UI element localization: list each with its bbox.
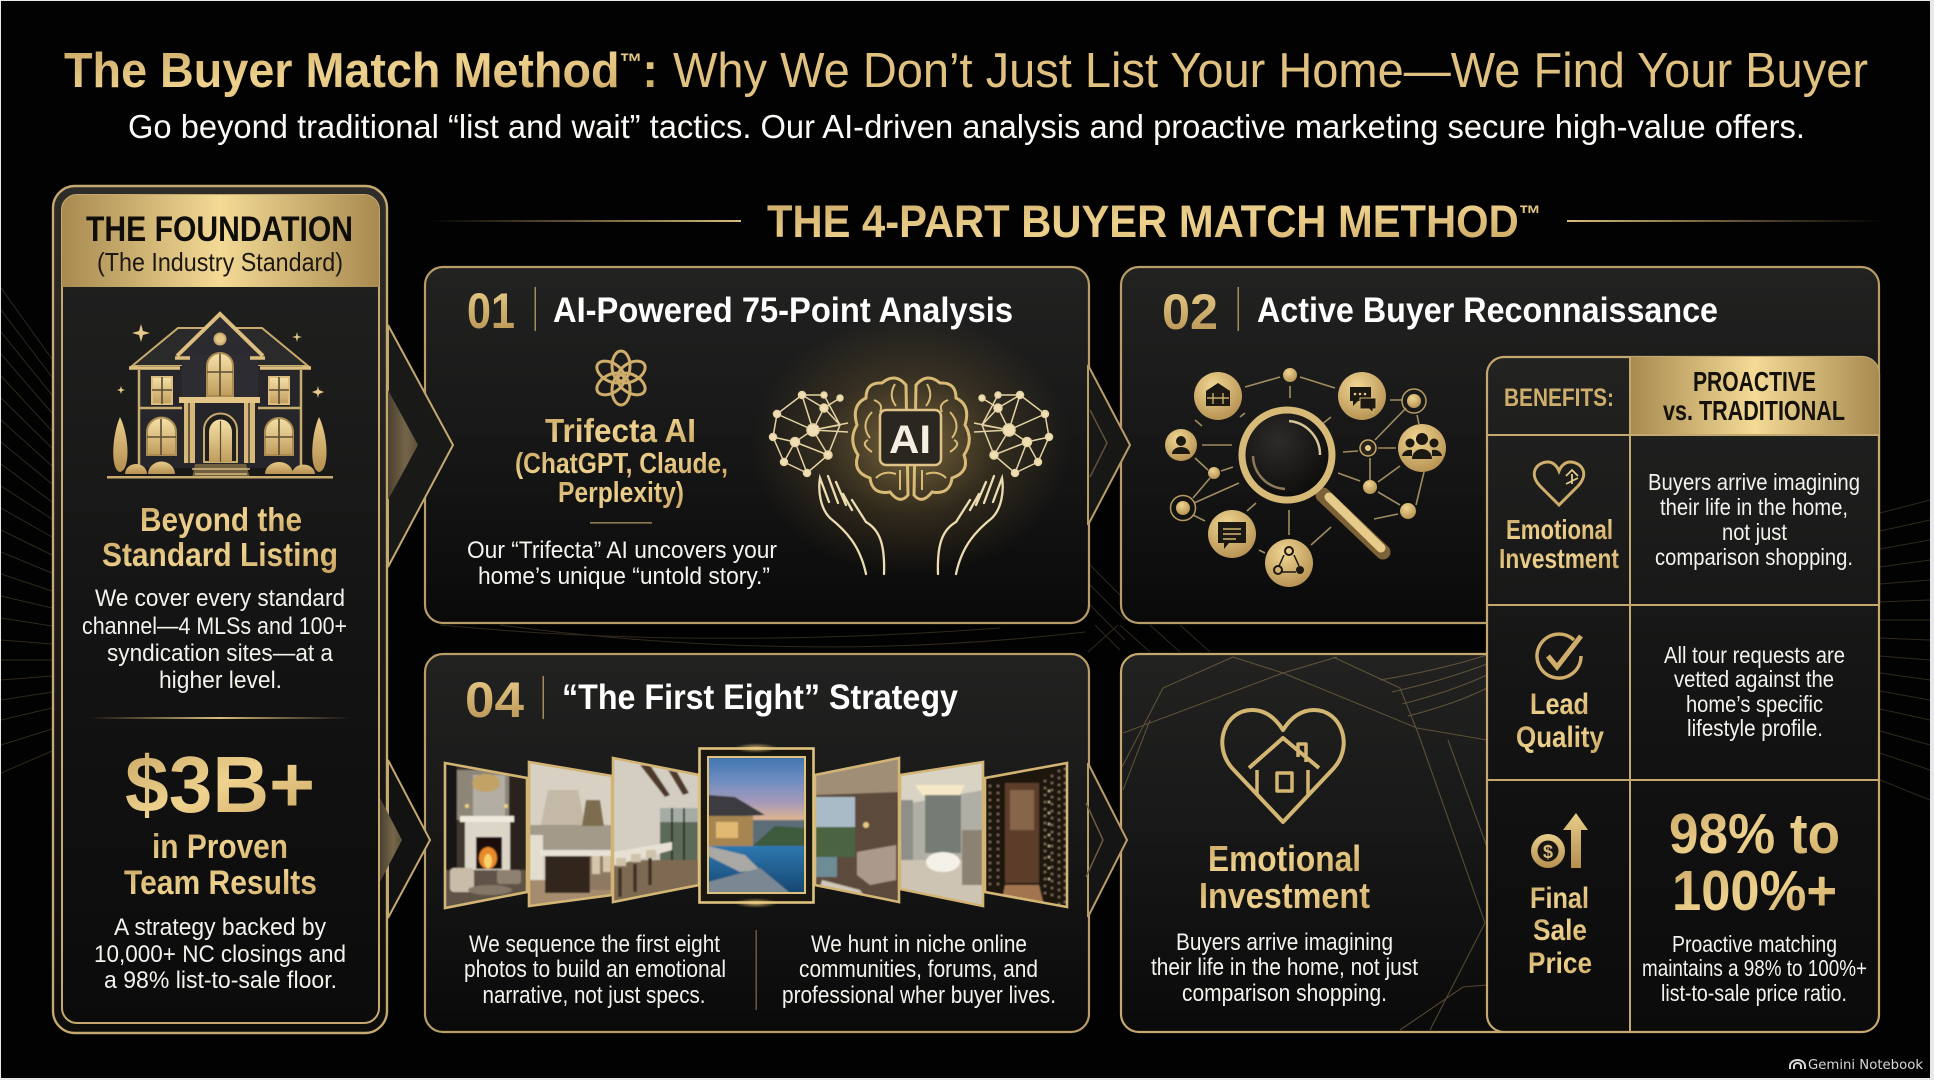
row: emotional investment: not just <box>1722 519 1787 545</box>
arrow: 04 to emotional investment <box>1086 763 1127 917</box>
arrow: foundation to 04 <box>380 760 430 918</box>
table header: BENEFITS: <box>1504 384 1614 412</box>
row: final sale price: Sale <box>1533 914 1587 947</box>
foundation header: THE FOUNDATION <box>86 210 353 249</box>
text: trifecta description <box>467 537 777 590</box>
heading: beyond the standard listing: Standard Listing <box>102 536 338 573</box>
panel: 04 background <box>425 654 1089 1032</box>
row: emotional investment <box>1499 462 1860 574</box>
panel 01 heading: 01 <box>467 283 515 339</box>
row: lead quality: home’s specific <box>1686 691 1823 717</box>
heading: emotional investment: Emotional <box>1208 838 1361 879</box>
text: trifecta AI: (ChatGPT, Claude, <box>515 448 728 480</box>
title: The Buyer Match Method <box>64 44 647 98</box>
panel: 02 background <box>1121 267 1879 623</box>
photo: living room <box>444 762 528 910</box>
text: first eight description: narrative, not just specs. <box>482 982 706 1009</box>
photo: bathroom <box>900 760 984 908</box>
row: lead quality: lifestyle profile. <box>1687 715 1823 741</box>
text: niche communities description: We hunt in niche online <box>811 931 1027 958</box>
icon: trifecta knot <box>593 351 649 405</box>
photo strip <box>440 743 1072 913</box>
table header <box>1504 357 1879 435</box>
text: first eight description <box>464 931 726 1009</box>
text: trifecta AI: Perplexity) <box>558 477 684 509</box>
panel 01 heading: AI-Powered 75-Point Analysis <box>553 291 1013 330</box>
text: foundation proof: A strategy backed by <box>114 914 327 941</box>
text: emotional investment description: their life in the home, not just <box>1151 954 1418 981</box>
text: niche communities description <box>782 931 1056 1009</box>
row: emotional investment: their life in the home, <box>1660 494 1848 520</box>
panel 02 heading <box>1162 284 1718 340</box>
section heading: ™ <box>1519 201 1541 228</box>
icon: coin and up arrow: $ <box>1543 842 1553 862</box>
photo: wine cellar <box>984 762 1068 908</box>
photo: great room <box>612 756 698 904</box>
row: final sale price: Proactive matching <box>1672 931 1837 957</box>
panel 04 heading <box>465 672 958 728</box>
icon: AI brain with hands and networks <box>751 315 1071 575</box>
row: lead quality: Lead <box>1530 688 1589 721</box>
text: emotional investment description: comparison shopping. <box>1182 980 1387 1007</box>
heading: beyond the standard listing: Beyond the <box>140 501 302 538</box>
icon: heart with pin <box>1534 462 1584 505</box>
text: foundation description: higher level. <box>159 667 282 694</box>
text: trifecta description: home’s unique “untold story.” <box>478 563 770 590</box>
text: foundation description: We cover every standard <box>95 585 345 612</box>
text: foundation description: channel—4 MLSs and 100+ <box>82 613 347 640</box>
text: emotional investment description <box>1151 929 1418 1007</box>
text: niche communities description: professional wher buyer lives. <box>782 982 1056 1009</box>
text: trifecta description: Our “Trifecta” AI uncovers your <box>467 537 777 564</box>
title: : <box>642 44 658 98</box>
title: ™ <box>620 49 642 76</box>
stat: 98% to 100%+ <box>1669 802 1840 923</box>
row: final sale price <box>1528 802 1867 1006</box>
text: foundation proof: 10,000+ NC closings and <box>94 941 346 968</box>
icon: gold house <box>107 314 333 478</box>
panel: emotional investment background <box>1121 654 1521 1032</box>
heading: emotional investment <box>1199 838 1370 916</box>
subtitle: Go beyond traditional “list and wait” tactics. Our AI-driven analysis and proactive marketing secure high-value offers. <box>128 108 1805 145</box>
text: foundation proof <box>94 914 346 994</box>
row: emotional investment: Investment <box>1499 543 1619 574</box>
section heading: THE 4-PART BUYER MATCH METHOD <box>767 196 1578 247</box>
icon: AI brain with hands and networks: AI <box>889 418 931 462</box>
panel: 01 background <box>425 267 1089 623</box>
stat: 98% to 100%+: 98% to <box>1669 802 1840 866</box>
row: lead quality <box>1516 634 1845 754</box>
row: lead quality: Quality <box>1516 721 1604 754</box>
photo: hero infinity pool <box>700 743 814 908</box>
table header: PROACTIVE <box>1693 366 1816 397</box>
text: emotional investment description: Buyers arrive imagining <box>1176 929 1393 956</box>
row: emotional investment: comparison shopping. <box>1655 544 1853 570</box>
icon: coin and up arrow <box>1531 813 1588 868</box>
icon: check circle <box>1537 634 1581 678</box>
panel: benefits table <box>1487 357 1879 1032</box>
foundation header: (The Industry Standard) <box>97 247 343 277</box>
panel 02 heading: Active Buyer Reconnaissance <box>1257 291 1718 330</box>
text: foundation description <box>82 585 347 694</box>
icon: heart with house <box>1222 710 1344 822</box>
text: first eight description: We sequence the first eight <box>469 931 720 958</box>
row: emotional investment: Buyers arrive imagining <box>1648 469 1860 495</box>
section heading <box>426 196 1885 247</box>
arrow: foundation to 01 <box>388 325 453 567</box>
watermark: Gemini Notebook: Gemini Notebook <box>1808 1057 1923 1073</box>
row: lead quality: All tour requests are <box>1664 642 1845 668</box>
table header: vs. TRADITIONAL <box>1663 395 1845 426</box>
photo: bedroom <box>814 756 900 904</box>
panel: foundation <box>53 186 387 1033</box>
row: final sale price: list-to-sale price ratio. <box>1661 980 1847 1006</box>
stat: $3B+ in proven team results: Team Results <box>124 864 317 902</box>
stat: $3B+ in proven team results <box>124 740 317 902</box>
title <box>64 44 1868 98</box>
stat: $3B+ in proven team results: in Proven <box>152 828 288 866</box>
icon: magnifier and buyer network <box>1165 368 1446 587</box>
text: first eight description: photos to build an emotional <box>464 956 726 983</box>
stat: $3B+ in proven team results: $3B+ <box>125 740 315 829</box>
panel 04 heading: “The First Eight” Strategy <box>562 678 958 717</box>
row: final sale price: maintains a 98% to 100%+ <box>1642 955 1867 981</box>
title: Why We Don’t Just List Your Home—We Find Your Buyer <box>673 44 1868 98</box>
arrow: 01 to 02 <box>1088 365 1130 525</box>
panel 04 heading: 04 <box>465 672 524 728</box>
row: emotional investment: Emotional <box>1506 514 1613 545</box>
row: final sale price: Price <box>1528 947 1592 980</box>
panel 01 heading <box>467 283 1013 339</box>
text: trifecta AI: Trifecta AI <box>545 412 696 449</box>
photo: kitchen <box>528 760 612 908</box>
text: foundation proof: a 98% list-to-sale floor. <box>104 967 337 994</box>
text: trifecta AI <box>515 412 728 509</box>
heading: emotional investment: Investment <box>1199 875 1370 916</box>
heading: beyond the standard listing <box>102 501 338 573</box>
stat: 98% to 100%+: 100%+ <box>1672 859 1837 923</box>
text: niche communities description: communities, forums, and <box>799 956 1038 983</box>
foundation header <box>62 195 379 287</box>
row: lead quality: vetted against the <box>1674 666 1834 692</box>
panel 02 heading: 02 <box>1162 284 1218 340</box>
row: final sale price: Final <box>1530 882 1589 915</box>
text: foundation description: syndication sites—at a <box>107 640 333 667</box>
